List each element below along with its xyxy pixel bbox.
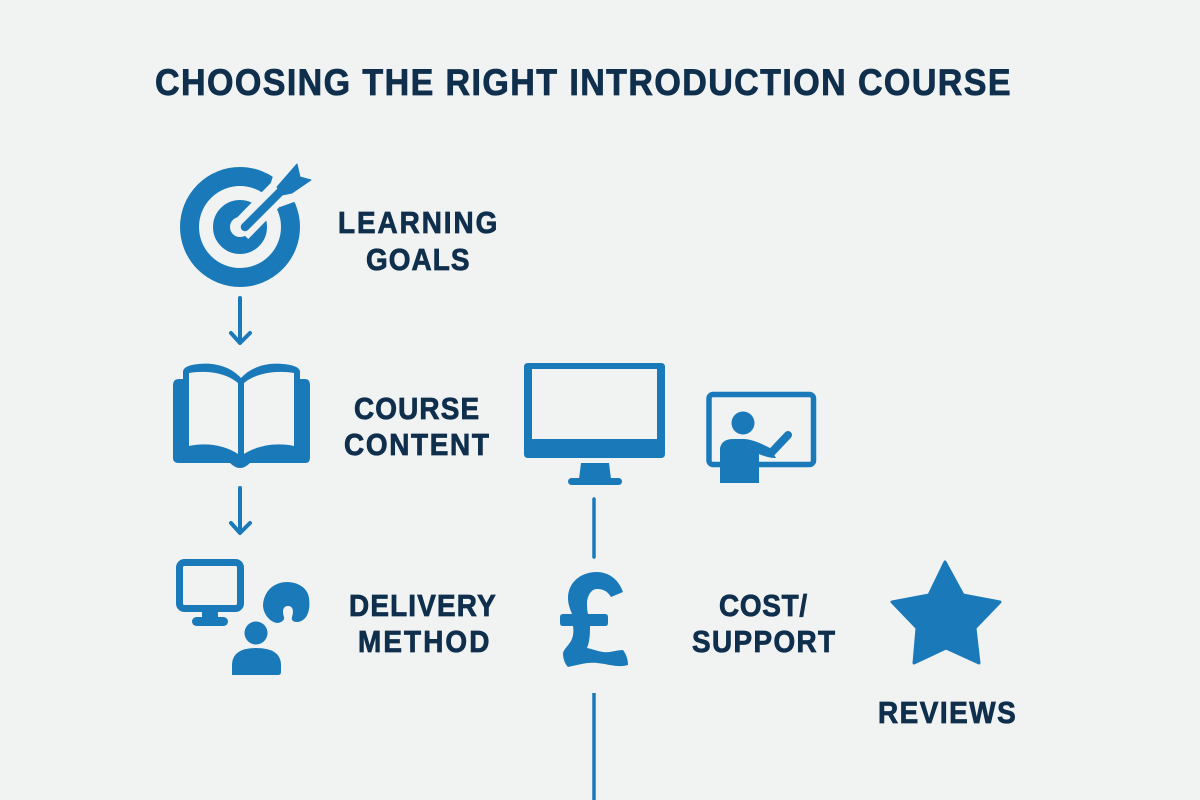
label: delivery method xyxy=(349,589,496,659)
icon: headset blob xyxy=(263,582,309,623)
icon: delivery method xyxy=(180,562,309,675)
icon: open book xyxy=(173,364,310,468)
icon: star xyxy=(892,562,1000,663)
label: learning goals: GOALS xyxy=(366,243,470,277)
label: course content: COURSE xyxy=(354,392,479,426)
connector line: pound downward xyxy=(592,693,596,800)
label: course content: CONTENT xyxy=(344,428,489,462)
title: CHOOSING THE RIGHT INTRODUCTION COURSE xyxy=(155,62,1011,103)
arrow: content to delivery xyxy=(231,488,250,533)
label: delivery method: DELIVERY xyxy=(349,589,496,623)
arrow: goals to content xyxy=(231,298,250,343)
label: cost / support: COST/ xyxy=(719,589,807,623)
label: delivery method: METHOD xyxy=(358,625,489,659)
label: learning goals xyxy=(338,206,497,277)
icon: pound sign xyxy=(560,572,628,667)
label: course content xyxy=(344,392,489,462)
icon: teacher at board xyxy=(709,394,814,483)
icon: large monitor xyxy=(524,363,665,485)
icon: small monitor xyxy=(180,562,240,626)
label: cost / support: SUPPORT xyxy=(692,625,835,659)
icon: person xyxy=(232,622,281,675)
icon: target with arrow xyxy=(190,160,320,278)
label: reviews: REVIEWS xyxy=(878,696,1016,730)
label: learning goals: LEARNING xyxy=(338,206,497,240)
connector line: monitor to pound xyxy=(592,499,596,557)
label: cost / support xyxy=(692,589,835,659)
